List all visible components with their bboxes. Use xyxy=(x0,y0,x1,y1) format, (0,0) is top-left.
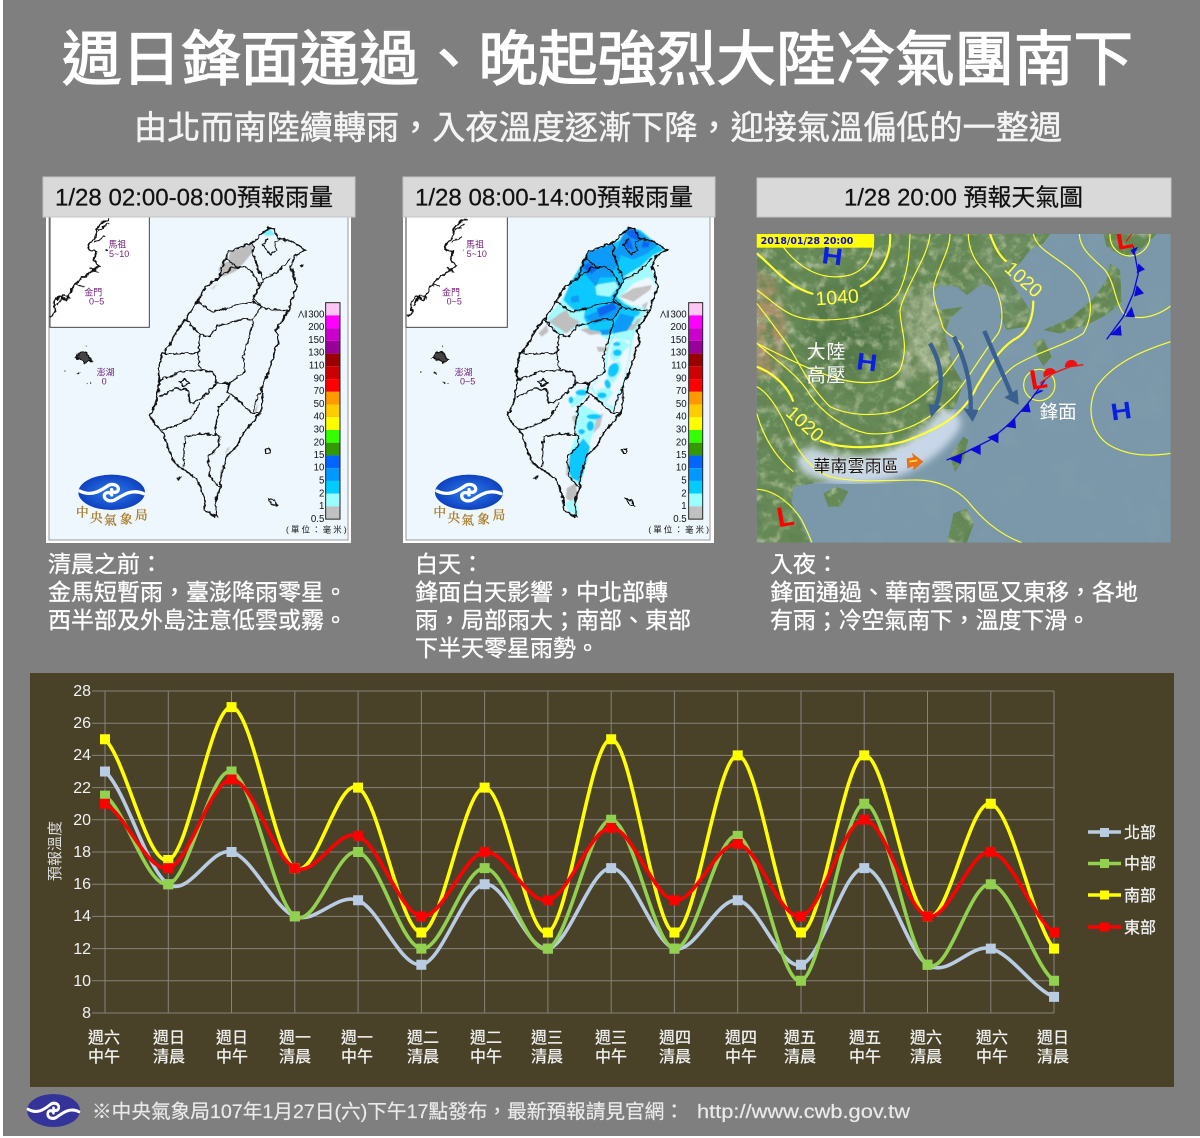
text block: daytime xyxy=(415,551,691,661)
legend: rainfall scale: 70 xyxy=(314,386,324,397)
legend: rainfall scale: 5 xyxy=(319,476,324,487)
logo: CWB: 中 xyxy=(76,505,89,520)
x axis labels: 週三 xyxy=(531,1029,563,1047)
header: rainfall 2 xyxy=(403,177,715,217)
sea xyxy=(757,234,1171,543)
logo: CWB: 央 xyxy=(90,510,103,525)
labels: 華南雲雨區 xyxy=(813,457,899,476)
legend: rainfall scale: 130 xyxy=(308,348,324,359)
panel: forecast weather map: L xyxy=(1113,222,1136,256)
legend: 東部 xyxy=(1124,919,1156,937)
map: Taiwan rainfall 2: 5~10 xyxy=(467,249,487,259)
legend: rainfall scale: 110 xyxy=(671,360,687,371)
front: cold xyxy=(947,247,1145,464)
header: weather chart: 1/28 20:00 預報天氣圖 xyxy=(844,184,1083,212)
y axis title: 預報溫度 xyxy=(47,821,64,881)
series: central xyxy=(105,771,1054,981)
legend: 南部 xyxy=(1124,887,1156,905)
logo: CWB: 氣 xyxy=(104,513,117,528)
text block: daytime: 下半天零星雨勢。 xyxy=(415,635,599,661)
header: weather chart xyxy=(757,178,1171,217)
x axis labels: 中午 xyxy=(725,1048,757,1066)
x axis labels: 清晨 xyxy=(531,1048,563,1066)
legend: rainfall scale: 90 xyxy=(676,373,687,384)
y axis labels: 16 xyxy=(73,876,91,893)
x axis labels: 週六 xyxy=(88,1029,120,1047)
x axis labels: 週二 xyxy=(407,1029,439,1047)
x axis labels: 週一 xyxy=(279,1029,311,1047)
x axis labels: 中午 xyxy=(976,1048,1008,1066)
logo: CWB xyxy=(433,475,505,528)
legend: rainfall scale: 20 xyxy=(314,437,324,448)
x axis labels: 清晨 xyxy=(910,1048,942,1066)
front: warm xyxy=(1040,234,1132,383)
x axis labels: 週六 xyxy=(910,1029,942,1047)
y axis labels: 28 xyxy=(73,683,91,700)
x axis labels: 中午 xyxy=(88,1048,120,1066)
x axis labels: 週四 xyxy=(659,1029,691,1047)
legend: rainfall scale: 300 xyxy=(308,309,324,320)
x axis labels: 清晨 xyxy=(407,1048,439,1066)
text block: before dawn: 西半部及外島注意低雲或霧。 xyxy=(48,607,347,633)
logo: CWB: 局 xyxy=(493,508,505,522)
panel: rainfall map 02:00-08:00 xyxy=(46,215,351,543)
x axis labels: 週一 xyxy=(341,1029,373,1047)
text block: daytime: 白天： xyxy=(415,551,484,577)
logo: CWB: 象 xyxy=(477,512,490,526)
logo: CWB: 氣 xyxy=(461,513,474,528)
x axis labels: 週五 xyxy=(784,1029,816,1047)
legend: rainfall scale: 20 xyxy=(676,437,687,448)
labels xyxy=(807,341,1077,476)
logo: CWB: 央 xyxy=(447,510,460,525)
text block: daytime: 鋒面白天影響，中北部轉 xyxy=(415,579,668,605)
x axis labels: 清晨 xyxy=(659,1048,691,1066)
map: Taiwan rainfall 2: 金門 xyxy=(442,286,460,297)
yellow date tag xyxy=(757,234,874,248)
pressure letters: H xyxy=(820,241,844,271)
x axis labels: 清晨 xyxy=(279,1048,311,1066)
text block: before dawn: 清晨之前： xyxy=(48,551,163,577)
map: Taiwan rainfall 1: 0~5 xyxy=(89,297,104,307)
footer text: http://www.cwb.gov.tw xyxy=(697,1101,911,1123)
legend: rainfall scale: 150 xyxy=(308,335,324,346)
logo: CWB: 象 xyxy=(120,512,133,526)
pressure letters: H xyxy=(1109,396,1133,426)
labels: 高壓 xyxy=(807,364,845,386)
arrows: cold air xyxy=(928,331,1019,422)
panel: forecast weather map: L xyxy=(774,500,797,533)
legend: 中部 xyxy=(1124,855,1156,873)
title: 週日鋒面通過、晚起強烈大陸冷氣團南下 xyxy=(62,26,1133,93)
x axis labels xyxy=(88,1029,1069,1066)
legend: rainfall scale: 15 xyxy=(676,450,687,461)
header: rainfall 2: 1/28 08:00-14:00預報雨量 xyxy=(415,184,693,212)
x axis labels: 週日 xyxy=(216,1029,248,1047)
legend: rainfall scale: 30 xyxy=(676,424,687,435)
legend: rainfall scale: 2 xyxy=(681,488,687,499)
legend: rainfall scale: 70 xyxy=(676,386,687,397)
y axis labels xyxy=(73,683,91,1022)
y axis labels: 26 xyxy=(73,715,91,732)
pressure letters xyxy=(820,241,1133,426)
legend: rainfall scale: 50 xyxy=(676,399,687,410)
text block: daytime: 雨，局部雨大；南部、東部 xyxy=(415,607,691,633)
y axis labels: 14 xyxy=(73,908,91,925)
yellow date tag: 2018/01/28 20:00 xyxy=(761,236,854,247)
text block: before dawn: 金馬短暫雨，臺澎降雨零星。 xyxy=(48,579,347,605)
panel: forecast weather map: L xyxy=(1027,362,1050,396)
header: rainfall 1: 1/28 02:00-08:00預報雨量 xyxy=(55,184,333,212)
x axis labels: 中午 xyxy=(849,1048,881,1066)
legend: rainfall scale: 1 xyxy=(319,501,324,512)
map: Taiwan rainfall 1: 金門 xyxy=(84,286,102,297)
legend: rainfall scale: 30 xyxy=(314,424,324,435)
x axis labels: 週日 xyxy=(153,1029,185,1047)
map: Taiwan rainfall 2: 0~5 xyxy=(460,377,475,387)
y axis labels: 24 xyxy=(73,747,91,764)
x axis labels: 中午 xyxy=(216,1048,248,1066)
logo: CWB xyxy=(76,475,148,528)
map: Taiwan rainfall 2: 澎湖 xyxy=(455,366,473,377)
text block: night: 鋒面通過、華南雲雨區又東移，各地 xyxy=(770,579,1138,605)
x axis labels: 中午 xyxy=(595,1048,627,1066)
x axis labels: 中午 xyxy=(470,1048,502,1066)
y axis labels: 12 xyxy=(73,941,91,958)
legend: rainfall scale: 300 xyxy=(671,309,687,320)
legend: rainfall scale: (單位：毫米) xyxy=(648,524,709,534)
panel: rainfall map 08:00-14:00 xyxy=(403,215,714,543)
legend: rainfall scale: 15 xyxy=(314,450,324,461)
isobar labels: 1020 xyxy=(781,402,827,447)
footer logo xyxy=(27,1094,80,1127)
legend: 北部 xyxy=(1124,824,1156,842)
x axis labels: 週五 xyxy=(849,1029,881,1047)
map: Taiwan rainfall 1: 5~10 xyxy=(109,249,129,259)
legend: rainfall scale: 90 xyxy=(314,373,324,384)
icon: orange arrow xyxy=(907,453,923,471)
legend: rainfall scale: 10 xyxy=(676,463,687,474)
legend: rainfall scale: ≧ xyxy=(660,309,672,319)
labels: 鋒面 xyxy=(1039,402,1077,423)
y axis labels: 20 xyxy=(73,812,91,829)
logo: CWB: 中 xyxy=(433,505,446,520)
map: Taiwan rainfall 2: 0~5 xyxy=(447,297,462,307)
legend: rainfall scale: 200 xyxy=(308,322,324,333)
legend: rainfall scale: 0.5 xyxy=(311,514,324,525)
isobar labels: 1040 xyxy=(815,286,860,310)
legend: rainfall scale: 0.5 xyxy=(673,514,687,525)
x axis labels: 清晨 xyxy=(784,1048,816,1066)
footer text: ※中央氣象局107年1月27日(六)下午17點發布，最新預報請見官網： xyxy=(92,1101,684,1123)
map: Taiwan rainfall 1: 澎湖 xyxy=(97,366,115,377)
legend: rainfall scale: 5 xyxy=(681,476,687,487)
text block: night: 入夜： xyxy=(770,551,839,577)
x axis labels: 週二 xyxy=(470,1029,502,1047)
series: north xyxy=(105,772,1054,997)
y axis labels: 10 xyxy=(73,973,91,990)
legend: rainfall scale: (單位：毫米) xyxy=(286,524,347,534)
panel: temperature line chart xyxy=(30,673,1174,1087)
legend: rainfall scale: 150 xyxy=(671,335,687,346)
y axis labels: 22 xyxy=(73,780,91,797)
legend: rainfall scale: 200 xyxy=(671,322,687,333)
legend: rainfall scale: 1 xyxy=(681,501,687,512)
legend: rainfall scale: 110 xyxy=(309,360,324,371)
text block: before dawn xyxy=(48,551,347,633)
map: Taiwan rainfall 1: 馬祖 xyxy=(108,238,126,249)
grid lines xyxy=(92,691,1054,1013)
isobars xyxy=(757,216,1171,543)
cloud rain band xyxy=(812,423,947,470)
x axis labels: 清晨 xyxy=(1037,1048,1069,1066)
header: rainfall 1 xyxy=(43,177,355,217)
legend: rainfall scale xyxy=(286,303,347,534)
legend xyxy=(1088,824,1156,937)
logo: CWB: 局 xyxy=(135,508,148,522)
isobar labels: 1020 xyxy=(1000,258,1046,302)
x axis labels: 清晨 xyxy=(153,1048,185,1066)
x axis labels: 中午 xyxy=(341,1048,373,1066)
land xyxy=(750,234,1171,543)
subtitle: 由北而南陸續轉雨，入夜溫度逐漸下降，迎接氣溫偏低的一整週 xyxy=(134,109,1062,146)
pressure letters: H xyxy=(855,347,879,377)
text block: night: 有雨；冷空氣南下，溫度下滑。 xyxy=(770,607,1090,633)
labels: 大陸 xyxy=(807,341,845,363)
x axis labels: 週六 xyxy=(976,1029,1008,1047)
legend: rainfall scale: 40 xyxy=(676,412,687,423)
legend: rainfall scale xyxy=(648,303,709,534)
map: Taiwan rainfall 2 xyxy=(406,217,709,534)
legend: rainfall scale: 40 xyxy=(314,412,324,423)
y axis labels: 18 xyxy=(73,844,91,861)
x axis labels: 週三 xyxy=(595,1029,627,1047)
series: south xyxy=(105,707,1054,949)
series: east xyxy=(105,780,1054,933)
legend: rainfall scale: 50 xyxy=(314,399,324,410)
y axis labels: 8 xyxy=(82,1005,91,1022)
x axis labels: 週日 xyxy=(1037,1029,1069,1047)
map: Taiwan rainfall 1 xyxy=(50,217,347,534)
legend: rainfall scale: 10 xyxy=(314,463,324,474)
isobar labels xyxy=(781,258,1046,447)
legend: rainfall scale: 2 xyxy=(319,488,324,499)
legend: rainfall scale: ≧ xyxy=(298,309,310,319)
legend: rainfall scale: 130 xyxy=(671,348,687,359)
x axis labels: 週四 xyxy=(725,1029,757,1047)
map: Taiwan rainfall 1: 0 xyxy=(102,377,107,387)
map: Taiwan rainfall 2: 馬祖 xyxy=(466,238,484,249)
text block: night xyxy=(770,551,1138,633)
panel: forecast weather map xyxy=(750,216,1171,543)
